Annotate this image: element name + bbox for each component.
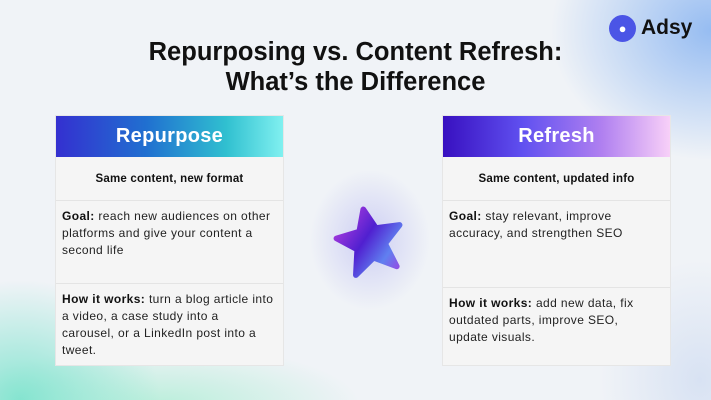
subtitle: Same content, new format — [96, 172, 243, 184]
how it works: carousel, or a LinkedIn post into a — [62, 326, 256, 340]
panel: refresh — [442, 115, 671, 366]
logo text: Adsy — [641, 16, 692, 39]
how it works: update visuals. — [449, 330, 535, 344]
title: Repurposing vs. Content Refresh: — [149, 38, 562, 66]
icon: owl: ● — [619, 20, 626, 36]
header: Refresh — [518, 125, 595, 147]
goal: Goal: stay relevant, improve — [449, 209, 612, 223]
logo — [609, 15, 692, 42]
header: Repurpose — [116, 125, 223, 147]
goal: platforms and give your content a — [62, 226, 253, 240]
subtitle: Same content, updated info — [478, 172, 634, 184]
title — [149, 38, 562, 96]
how it works: How it works: add new data, fix — [449, 296, 633, 310]
subtitle — [56, 157, 283, 201]
header — [443, 116, 670, 157]
goal: accuracy, and strengthen SEO — [449, 226, 623, 240]
goal: Goal: reach new audiences on other — [62, 209, 270, 223]
how it works — [449, 296, 633, 344]
icon: star — [334, 206, 402, 278]
how it works — [62, 292, 273, 357]
goal — [443, 201, 670, 288]
icon: owl — [609, 14, 636, 42]
panel: repurpose — [55, 115, 284, 366]
how it works: a video, a case study into a — [62, 309, 219, 323]
title: What’s the Difference — [226, 68, 485, 96]
subtitle — [443, 157, 670, 201]
how it works: How it works: turn a blog article into — [62, 292, 273, 306]
how it works: tweet. — [62, 343, 96, 357]
goal — [56, 201, 283, 284]
how it works: outdated parts, improve SEO, — [449, 313, 618, 327]
header — [56, 116, 283, 157]
goal: second life — [62, 243, 124, 257]
